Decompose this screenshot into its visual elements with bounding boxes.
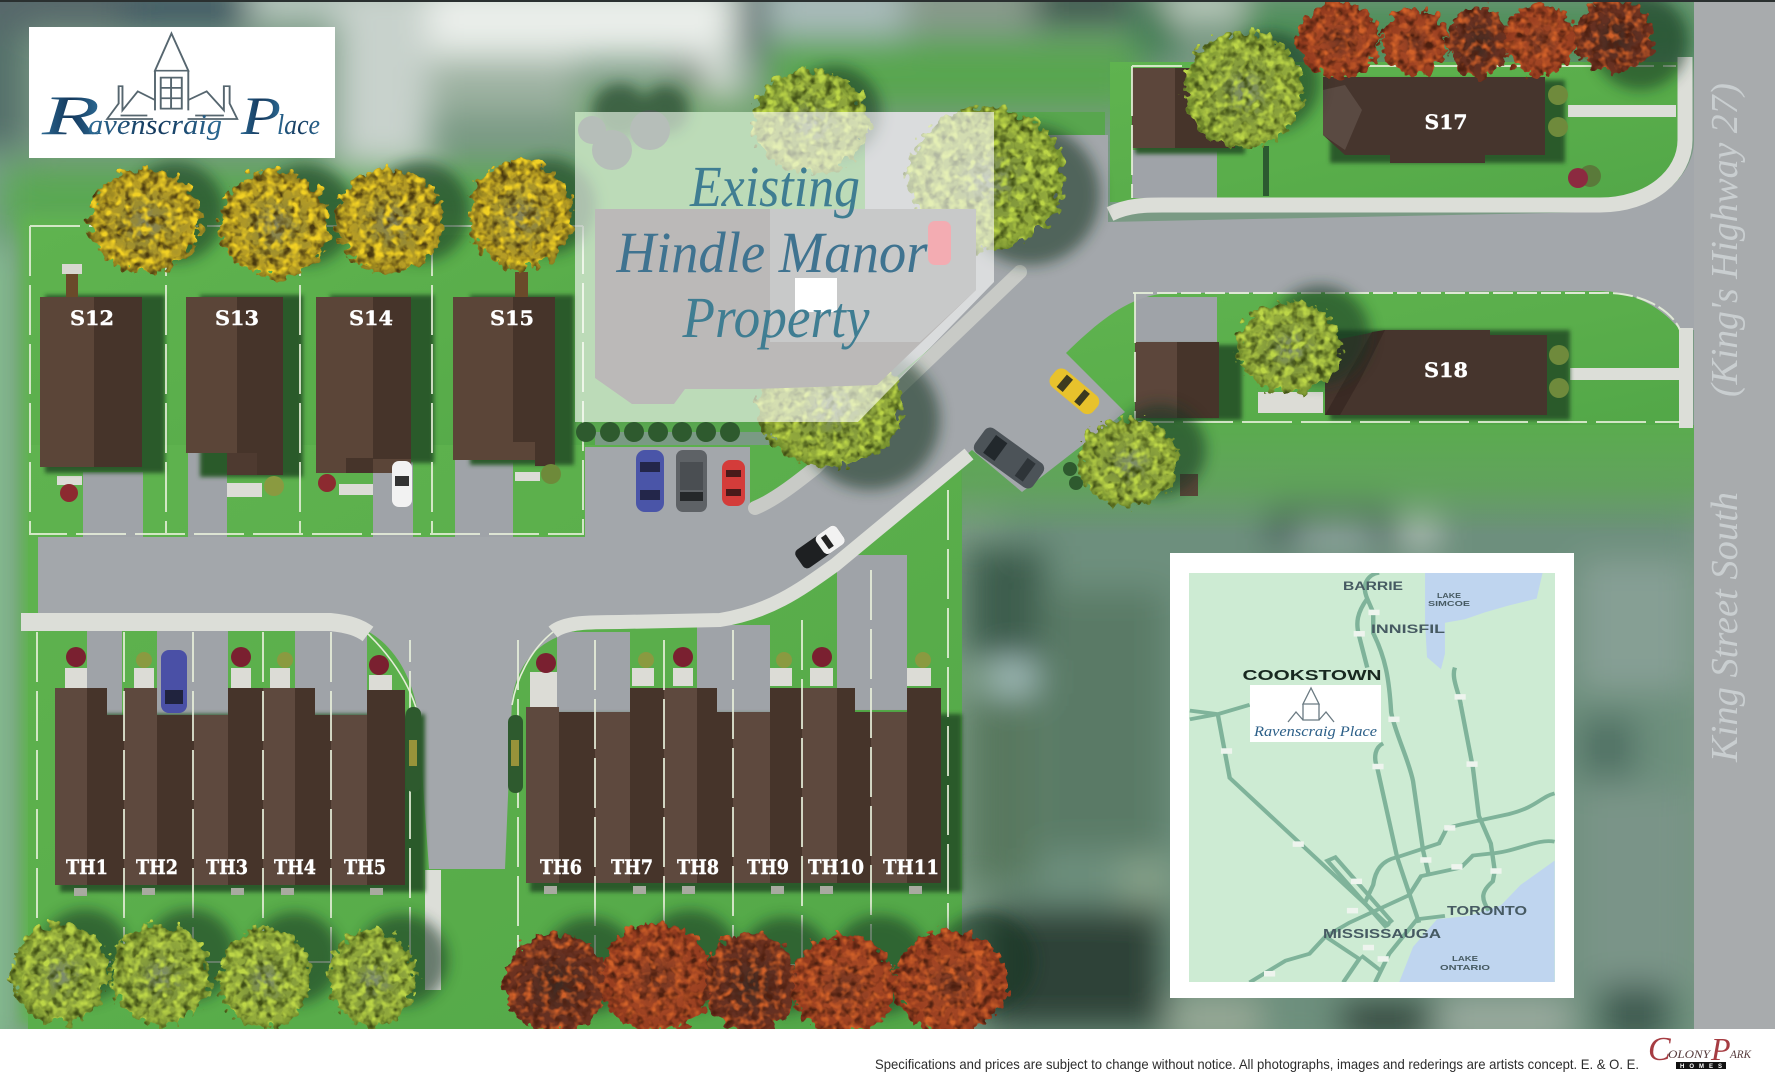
unit labels TH6 to TH11: TH6: [540, 855, 582, 879]
logo wordmark: [40, 85, 320, 147]
map town labels: INNISFIL: [1371, 622, 1445, 636]
map water bodies: [1399, 573, 1555, 982]
map mini logo: [1250, 685, 1381, 742]
logo: Colony Park Homes: [1648, 1031, 1752, 1070]
manor building footprint: [578, 110, 976, 404]
single houses S12 to S15: [40, 264, 555, 475]
car: white pickup: [793, 524, 847, 570]
trees: green around manor and S17 and S18: [752, 32, 1341, 506]
car: grey van parked: [676, 450, 707, 512]
label: King's Highway 27: (King's Highway 27): [1704, 83, 1746, 397]
house S12: [40, 264, 142, 467]
house S18: [1135, 330, 1547, 418]
unit labels TH1 to TH5: TH5: [344, 855, 386, 879]
car: white at S14: [392, 461, 412, 507]
unit labels TH6 to TH11: TH8: [677, 855, 719, 879]
map town labels: LAKE: [1437, 593, 1461, 600]
unit labels TH6 to TH11: TH11: [883, 855, 939, 879]
car: blue parked: [636, 450, 664, 512]
manor label: Hindle Manor: [616, 220, 928, 285]
unit labels TH1 to TH5: TH3: [206, 855, 248, 879]
house S14: [316, 297, 411, 473]
house S18: S18: [1424, 358, 1468, 382]
manor label: [616, 154, 928, 350]
townhouse block TH1 to TH5: [55, 688, 405, 885]
top dark edge: [0, 0, 1775, 2]
house S12: S12: [70, 306, 114, 330]
map town labels: MISSISSAUGA: [1323, 926, 1442, 941]
logo: Colony Park Homes: P: [1710, 1031, 1731, 1067]
footer strip: [0, 1029, 1775, 1080]
car: yellow taxi: [1046, 365, 1103, 417]
car: dark SUV: [971, 425, 1047, 491]
unit labels TH6 to TH11: [540, 855, 939, 879]
house S17: [1132, 68, 1545, 163]
house shadows: [45, 72, 1570, 892]
logo: Ravenscraig Place: [29, 27, 335, 158]
logo wordmark: P: [240, 86, 281, 146]
map town labels: TORONTO: [1447, 903, 1527, 918]
house S14: S14: [349, 306, 393, 330]
trees: red row below TH6 to TH11: [504, 923, 1007, 1035]
car: blue at TH2: [161, 650, 187, 713]
house S13: S13: [215, 306, 259, 330]
house S15: S15: [490, 306, 534, 330]
map town labels: [1242, 579, 1527, 972]
label: King Street South: King Street South: [1704, 492, 1746, 763]
car: red parked: [722, 460, 745, 506]
trees: green row below TH1 to TH5: [12, 923, 416, 1028]
map town labels: SIMCOE: [1428, 601, 1470, 608]
map town labels: LAKE: [1452, 956, 1478, 963]
house S17: S17: [1424, 110, 1468, 134]
logo: Colony Park Homes: HOMES: [1680, 1064, 1722, 1070]
road network: [21, 112, 1694, 869]
panel: location map: [1170, 553, 1574, 998]
footer disclaimer: Specifications and prices are subject to change without notice. All photographs, images and rederings are artists concept. E. & O. E.: [875, 1056, 1639, 1072]
white front walkways: [57, 392, 1323, 707]
map highways: [1190, 573, 1555, 982]
rear steps of townhouses: [74, 886, 922, 896]
logo: Colony Park Homes: C: [1648, 1031, 1671, 1068]
manor label: Existing: [689, 154, 860, 219]
map highway shields: [1221, 610, 1502, 977]
logo wordmark: avenscraig: [88, 110, 222, 141]
townhouse block TH6 to TH11: [526, 688, 941, 883]
dashed lot lines: [30, 66, 1680, 965]
trees: red row above S17: [1297, 0, 1654, 78]
shrubs and flower beds: [60, 85, 1601, 793]
manor label: Property: [682, 285, 870, 350]
unit labels TH1 to TH5: TH1: [66, 855, 108, 879]
unit labels TH6 to TH11: TH7: [611, 855, 653, 879]
map mini logo: Ravenscraig Place: [1253, 724, 1377, 740]
house S15: [453, 272, 555, 466]
map town labels: BARRIE: [1343, 579, 1403, 593]
logo wordmark: R: [40, 85, 100, 147]
road band: King Street: [1694, 2, 1775, 1029]
unit labels TH6 to TH11: TH10: [808, 855, 864, 879]
map town labels: ONTARIO: [1440, 965, 1491, 972]
icon: manor house line drawing: [107, 33, 237, 119]
unit labels TH1 to TH5: [66, 855, 386, 879]
logo: Colony Park Homes: ARK: [1729, 1047, 1752, 1061]
translucent overlay: [575, 112, 994, 422]
unit labels TH1 to TH5: TH4: [274, 855, 316, 879]
logo: Colony Park Homes: OLONY: [1668, 1047, 1711, 1061]
unit labels TH1 to TH5: TH2: [136, 855, 178, 879]
panel: existing Hindle Manor property: [575, 110, 994, 422]
map town labels: COOKSTOWN: [1242, 667, 1382, 684]
trees: yellow row above S12 to S15: [89, 161, 572, 278]
unit labels TH6 to TH11: TH9: [747, 855, 789, 879]
cars: [161, 365, 1103, 713]
house S13: [186, 297, 283, 475]
logo wordmark: lace: [277, 110, 320, 141]
driveways: [83, 150, 1217, 720]
